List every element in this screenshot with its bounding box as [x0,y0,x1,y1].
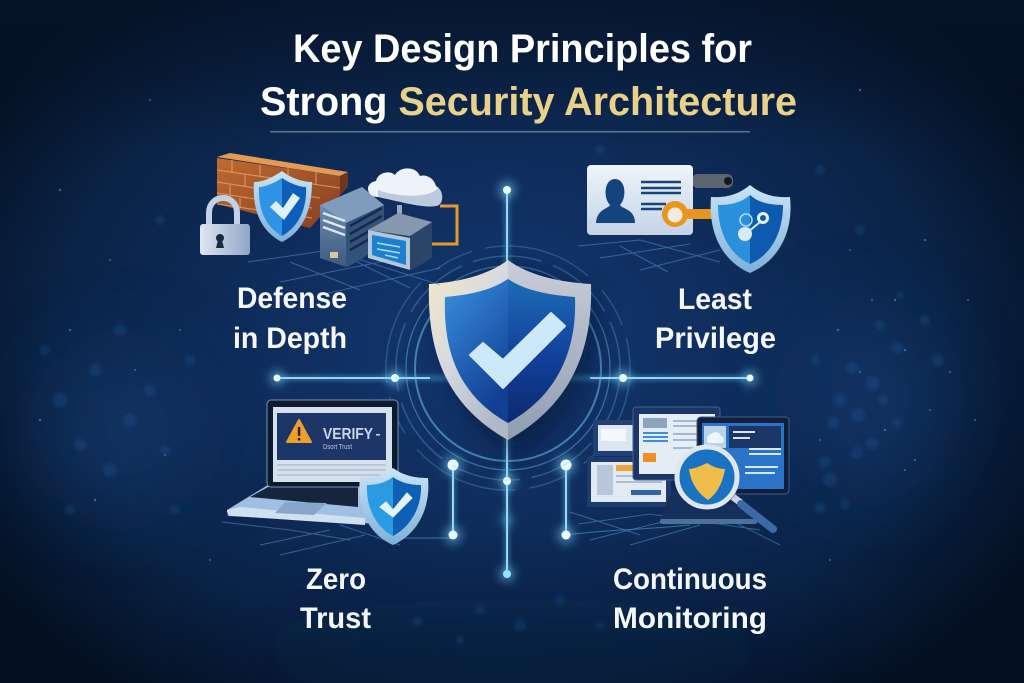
title: Strong Security Architecture [260,80,797,124]
label: defense in depth [233,282,347,355]
label: continuous monitoring: Monitoring [613,602,767,635]
icon: magnifying glass [677,447,773,529]
icon: brick wall [217,153,348,228]
icon: server tower [320,187,384,267]
title [260,27,797,124]
icon: terminal box [368,205,432,270]
icon group: zero trust [222,400,428,555]
label: continuous monitoring [613,563,767,635]
icon: padlock [200,198,250,255]
label: defense in depth: in Depth [233,322,347,355]
label: zero trust: Trust [300,602,371,635]
label: least privilege [655,283,776,355]
icon group: least privilege [578,165,791,273]
central shield with checkmark [429,260,594,453]
orange connector [432,206,457,244]
lower left screen [587,457,671,507]
icon: shield [359,468,428,545]
floor grid [248,250,440,295]
label: defense in depth: Defense [237,282,347,315]
circuit lines [270,182,757,581]
icon: shield [711,185,791,273]
label: continuous monitoring: Continuous [613,563,767,596]
icon: shield [254,171,312,242]
top center screen [633,407,720,480]
label: least privilege: Privilege [655,322,776,355]
icon: laptop: Dsort Trust [323,444,352,451]
strap [692,174,733,188]
icon: laptop [227,400,398,525]
right screen [697,417,789,494]
icon: key [662,201,718,227]
icon group: continuous monitoring [570,407,789,545]
icon: cloud [368,168,442,206]
stand [660,490,757,525]
label: zero trust: Zero [306,563,366,596]
small screen [593,420,641,456]
icon group: defense in depth [200,153,457,295]
icon: id card [587,165,693,235]
label: zero trust [300,563,371,635]
title: Key Design Principles for [293,27,752,71]
concentric rings [386,246,630,490]
label: least privilege: Least [678,283,752,316]
icon: laptop: VERIFY [323,426,373,443]
